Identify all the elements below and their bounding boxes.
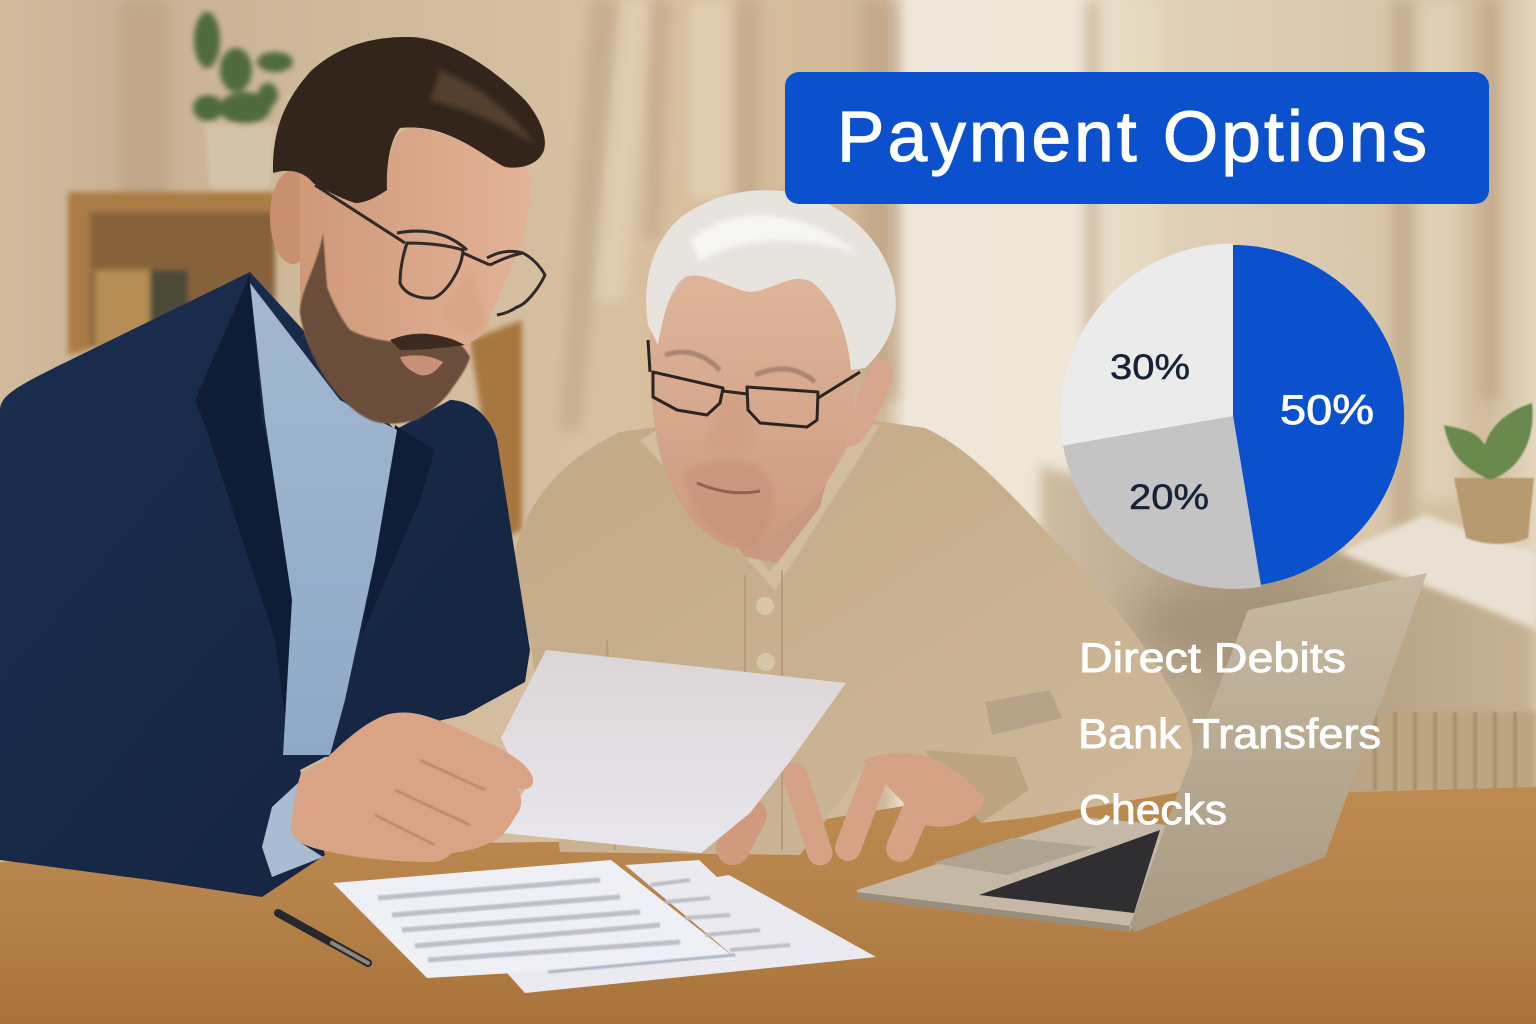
title text: Payment Options (837, 98, 1427, 177)
advisor moustache (390, 334, 465, 350)
advisor nose (440, 270, 487, 335)
laptop keyboard (979, 830, 1160, 913)
pie chart (1060, 243, 1404, 589)
slice: 20% bank transfers (1063, 416, 1261, 589)
older man collar and buttons (640, 425, 880, 590)
background: potted plant left (193, 12, 293, 188)
older man glasses (648, 340, 860, 427)
label 30%: 30% (1110, 348, 1190, 387)
legend: checks: Checks (1079, 786, 1227, 833)
held paper (493, 650, 846, 853)
front sheet (333, 860, 738, 978)
label 20%: 20% (1129, 478, 1209, 517)
legend: bank transfers: Bank Transfers (1078, 710, 1381, 757)
background: potted plant right (1444, 403, 1534, 544)
legend: direct debits: Direct Debits (1079, 634, 1346, 681)
person: older man (508, 190, 1192, 855)
older man neck (700, 440, 837, 563)
advisor ear (270, 170, 316, 264)
background: window sill and radiator (1040, 465, 1536, 800)
slice: 30% checks (1060, 243, 1233, 446)
laptop base (857, 817, 1167, 932)
advisor cuff and hand (262, 712, 533, 877)
advisor hair (273, 37, 545, 203)
back sheet (507, 860, 876, 993)
older man sweater (508, 420, 1192, 855)
background: bookshelf (68, 192, 522, 540)
older man face (649, 270, 855, 548)
advisor glasses (315, 185, 545, 315)
advisor hand (291, 712, 533, 862)
slice: 50% direct debits (1233, 245, 1404, 585)
pen (278, 913, 368, 963)
laptop lid (1130, 573, 1427, 932)
papers on table (333, 860, 876, 993)
table (0, 787, 1536, 1024)
title banner (785, 72, 1489, 204)
legend text list (1078, 634, 1381, 833)
advisor shirt (250, 283, 397, 755)
advisor cuff (262, 758, 325, 877)
laptop trackpad (933, 838, 1095, 875)
advisor jacket (0, 272, 530, 897)
advisor beard (300, 233, 470, 424)
laptop (857, 573, 1427, 932)
older man hair (646, 190, 896, 370)
advisor mouth (400, 355, 443, 375)
older man ear (846, 360, 893, 447)
advisor face (300, 128, 530, 423)
label 50%: 50% (1280, 386, 1374, 433)
older man fingers and hand (733, 753, 985, 853)
person: advisor (0, 37, 545, 897)
